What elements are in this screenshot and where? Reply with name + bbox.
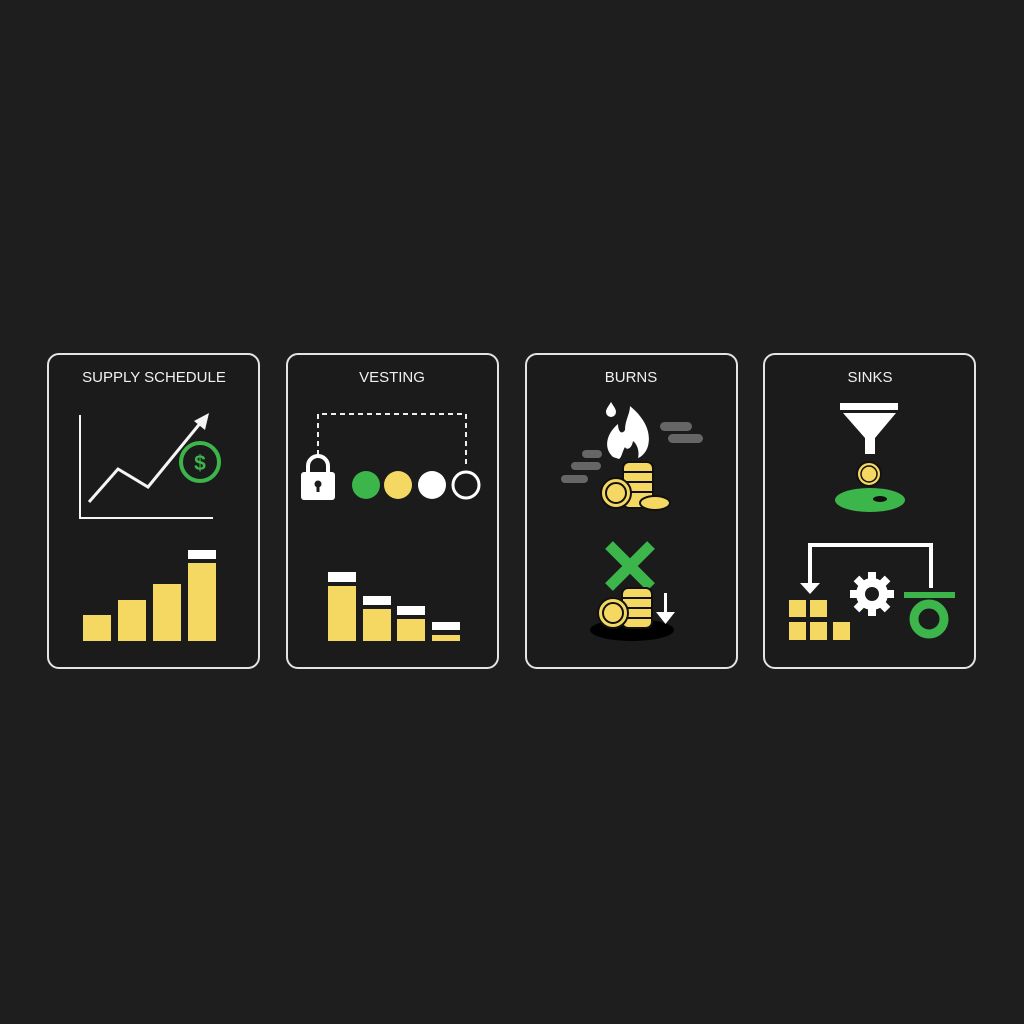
icon: funnel: [840, 403, 898, 454]
icon: burned coins in hole: [590, 588, 674, 641]
icon: flame: [607, 406, 649, 459]
bar chart: declining unlocks: [328, 572, 460, 641]
vesting progress dots: [352, 471, 479, 499]
motion lines: [561, 422, 703, 483]
icon: green tray ring: [904, 592, 955, 634]
panel: burns: [526, 354, 737, 668]
heading: supply schedule: SUPPLY SCHEDULE: [82, 369, 226, 386]
dashed connector: [318, 414, 466, 466]
icon: dollar coin: [181, 443, 219, 481]
arrow: down: [656, 593, 675, 624]
panel: supply schedule: [48, 354, 259, 668]
icon: coin dropping: [857, 462, 881, 486]
icon: green x: [609, 545, 651, 587]
panel: sinks: [764, 354, 975, 668]
icon: yellow blocks: [789, 600, 850, 640]
icon: gear: [850, 572, 894, 616]
arrow: feedback loop: [800, 545, 931, 594]
heading: burns: BURNS: [605, 369, 657, 386]
bar chart: rising supply: [83, 550, 216, 641]
icon: green sink hole: [835, 488, 905, 512]
heading: vesting: VESTING: [359, 369, 425, 386]
heading: sinks: SINKS: [847, 369, 893, 386]
panel: vesting: [287, 354, 498, 668]
icon: lock: [301, 456, 335, 500]
icon: dollar coin: $: [194, 452, 206, 475]
icon: coin stack: [601, 462, 670, 510]
line chart with arrow: [80, 413, 213, 518]
